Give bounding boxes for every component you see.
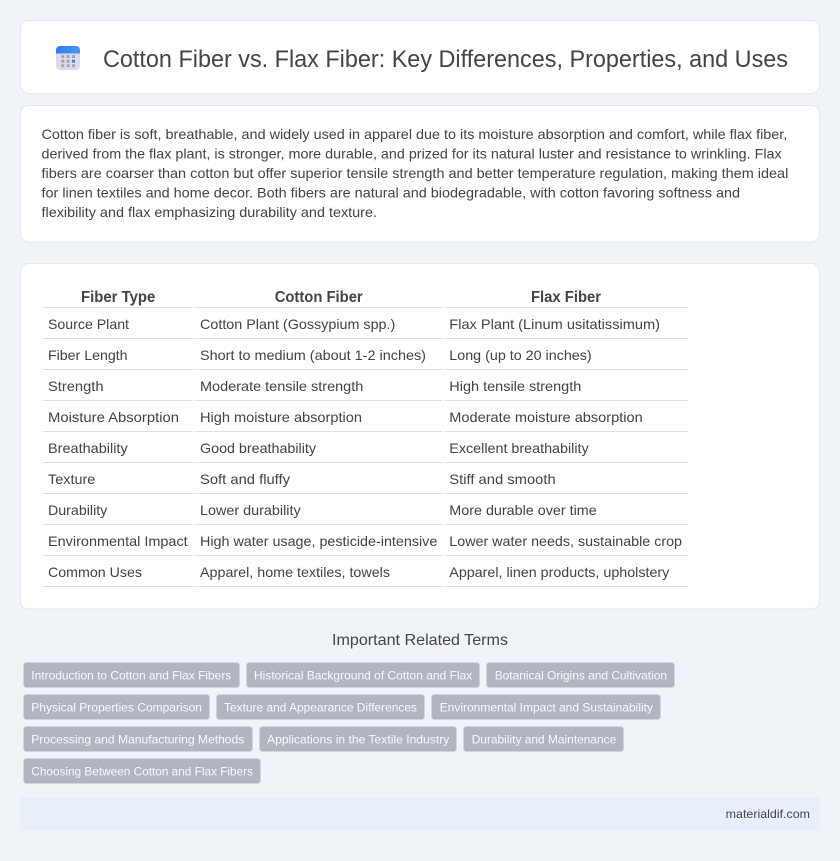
row: moisture absorption: Moderate moisture absorption xyxy=(449,409,643,425)
row: common uses xyxy=(48,564,669,580)
row: moisture absorption: High moisture absorption xyxy=(200,409,362,425)
tag: Physical Properties Comparison xyxy=(31,700,202,714)
row: texture: Soft and fluffy xyxy=(200,471,290,487)
row: source plant: Source Plant xyxy=(48,316,129,332)
tag xyxy=(24,694,210,720)
tag xyxy=(432,694,660,720)
tag list: related terms xyxy=(24,662,674,784)
tag xyxy=(24,758,260,784)
tag: Applications in the Textile Industry xyxy=(267,732,449,746)
row: durability xyxy=(48,502,597,518)
row: common uses: Apparel, linen products, upholstery xyxy=(449,564,669,580)
row: fiber length: Short to medium (about 1-2 inches) xyxy=(200,347,426,363)
row: environmental impact: High water usage, pesticide-intensive xyxy=(200,533,438,549)
title: Cotton Fiber vs. Flax Fiber: Key Differences, Properties, and Uses xyxy=(103,46,788,73)
footer source text: materialdif.com xyxy=(726,807,810,821)
icon: calendar grid xyxy=(56,46,80,70)
row: source plant: Flax Plant (Linum usitatissimum) xyxy=(449,316,660,332)
row: common uses: Common Uses xyxy=(48,564,142,580)
row: fiber length: Fiber Length xyxy=(48,347,128,363)
row: breathability: Excellent breathability xyxy=(449,440,589,456)
tag xyxy=(216,694,424,720)
row: source plant: Cotton Plant (Gossypium spp.) xyxy=(200,316,395,332)
tag: Processing and Manufacturing Methods xyxy=(31,732,244,746)
tag: Durability and Maintenance xyxy=(472,732,617,746)
panel: introduction xyxy=(20,106,820,242)
row: environmental impact xyxy=(48,533,682,549)
row: moisture absorption xyxy=(48,409,643,425)
tag: Introduction to Cotton and Flax Fibers xyxy=(31,668,231,682)
text block: introduction paragraph: for linen textiles and home decor. Both fibers are natural and biodegradable, with cotton favoring softness and xyxy=(42,184,740,200)
tag xyxy=(24,726,252,752)
table header row: Cotton Fiber xyxy=(275,289,363,306)
tag: Environmental Impact and Sustainability xyxy=(440,700,653,714)
row: strength: Moderate tensile strength xyxy=(200,378,363,394)
tag xyxy=(464,726,624,752)
text block: introduction paragraph: flexibility and flax emphasizing durability and texture. xyxy=(42,204,377,220)
table header row: Flax Fiber xyxy=(531,289,601,306)
row: environmental impact: Environmental Impact xyxy=(48,533,188,549)
row: breathability: Breathability xyxy=(48,440,128,456)
tag xyxy=(486,662,674,688)
row: breathability: Good breathability xyxy=(200,440,316,456)
row: strength: Strength xyxy=(48,378,104,394)
heading: important related terms: Important Related Terms xyxy=(332,632,508,649)
tag: Botanical Origins and Cultivation xyxy=(495,668,667,682)
row: texture xyxy=(48,471,556,487)
panel: header xyxy=(20,20,820,94)
row: common uses: Apparel, home textiles, towels xyxy=(200,564,390,580)
text block: introduction paragraph: Cotton fiber is soft, breathable, and widely used in apparel due to its moisture absorption and comfort, while flax fiber, xyxy=(42,126,787,142)
table header row: Fiber Type xyxy=(81,289,156,306)
panel: comparison table xyxy=(20,264,820,609)
tag xyxy=(260,726,456,752)
text block: introduction paragraph: derived from the flax plant, is stronger, more durable, and prized for its natural luster and resistance to wrinkling. Flax xyxy=(42,146,782,162)
row: texture: Texture xyxy=(48,471,96,487)
row: breathability xyxy=(48,440,589,456)
row: environmental impact: Lower water needs, sustainable crop xyxy=(449,533,682,549)
tag: Texture and Appearance Differences xyxy=(224,700,417,714)
tag xyxy=(24,662,240,688)
tag xyxy=(246,662,480,688)
tag: Choosing Between Cotton and Flax Fibers xyxy=(31,764,253,778)
row: strength xyxy=(48,378,581,394)
row: durability: Lower durability xyxy=(200,502,301,518)
row: source plant xyxy=(48,316,660,332)
row: moisture absorption: Moisture Absorption xyxy=(48,409,179,425)
row: durability: More durable over time xyxy=(449,502,597,518)
row: durability: Durability xyxy=(48,502,107,518)
row: texture: Stiff and smooth xyxy=(449,471,556,487)
footer bar xyxy=(20,797,820,831)
row: fiber length: Long (up to 20 inches) xyxy=(449,347,592,363)
text block: introduction paragraph: fibers are coarser than cotton but offer superior tensile strength and better temperature regulation, making them ideal xyxy=(42,165,788,181)
text block: introduction paragraph xyxy=(42,126,788,220)
tag: Historical Background of Cotton and Flax xyxy=(254,668,472,682)
row: strength: High tensile strength xyxy=(449,378,581,394)
table header row xyxy=(81,289,601,306)
row: fiber length xyxy=(48,347,592,363)
